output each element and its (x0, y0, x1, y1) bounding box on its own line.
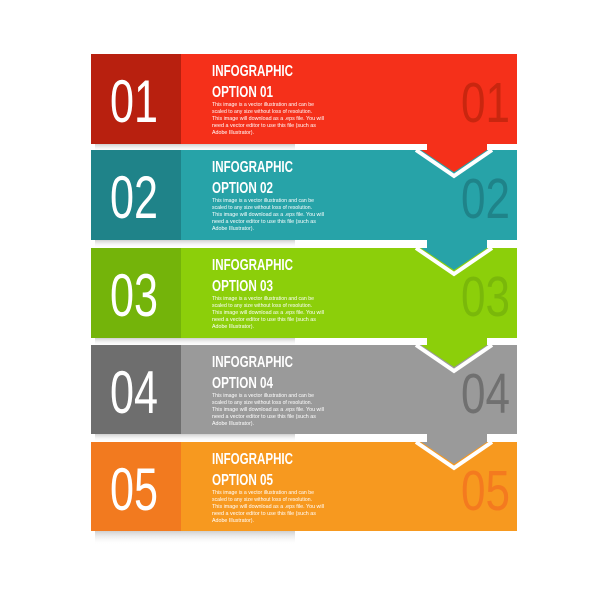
band 2: This image will download as a .eps file. You will (212, 212, 324, 218)
band 1: scaled to any size without loss of resolution. (212, 109, 312, 115)
band 5: This image will download as a .eps file. You will (212, 504, 324, 510)
band 3: INFOGRAPHIC (212, 257, 293, 274)
band 4: Adobe Illustrator). (212, 421, 254, 427)
band 5: scaled to any size without loss of resolution. (212, 497, 312, 503)
band 5: need a vector editor to use this file (such as (212, 511, 316, 517)
arrow 1 (416, 143, 492, 176)
band 1: 01 (110, 68, 158, 135)
band 2: This image is a vector illustration and can be (212, 198, 314, 204)
band 5: 05 (461, 459, 510, 523)
band 2: need a vector editor to use this file (such as (212, 219, 316, 225)
band 5: Adobe Illustrator). (212, 518, 254, 524)
band 2: Adobe Illustrator). (212, 226, 254, 232)
band 3: need a vector editor to use this file (such as (212, 317, 316, 323)
band 5: OPTION 05 (212, 472, 273, 489)
band 3 (91, 248, 517, 338)
band 2: OPTION 02 (212, 180, 273, 197)
band 2 (91, 150, 517, 240)
band 4: This image is a vector illustration and can be (212, 393, 314, 399)
band 4: need a vector editor to use this file (such as (212, 414, 316, 420)
band 2: 02 (110, 164, 158, 231)
band 4: This image will download as a .eps file. You will (212, 407, 324, 413)
band 2: 02 (461, 167, 510, 231)
band 5: 05 (110, 456, 158, 523)
shadows (95, 144, 295, 545)
band 4: OPTION 04 (212, 375, 273, 392)
band 4: scaled to any size without loss of resolution. (212, 400, 312, 406)
band 4: 04 (110, 359, 158, 426)
band 1: Adobe Illustrator). (212, 130, 254, 136)
band 2: INFOGRAPHIC (212, 159, 293, 176)
band 5 (91, 442, 517, 531)
band 1: This image is a vector illustration and can be (212, 102, 314, 108)
band 4: 04 (461, 362, 510, 426)
band 3: Adobe Illustrator). (212, 324, 254, 330)
band 3: 03 (110, 262, 158, 329)
band 4 (91, 345, 517, 434)
band 1: OPTION 01 (212, 84, 273, 101)
arrow 2 (416, 239, 492, 274)
band 3: scaled to any size without loss of resolution. (212, 303, 312, 309)
band 5: INFOGRAPHIC (212, 451, 293, 468)
band 1 (91, 54, 517, 144)
band 3: OPTION 03 (212, 278, 273, 295)
band 1: need a vector editor to use this file (such as (212, 123, 316, 129)
arrow 3 (416, 337, 492, 371)
band 3: This image will download as a .eps file. You will (212, 310, 324, 316)
band 2: scaled to any size without loss of resolution. (212, 205, 312, 211)
arrow 4 (416, 433, 492, 468)
band 3: This image is a vector illustration and can be (212, 296, 314, 302)
band 3: 03 (461, 265, 510, 329)
band 4: INFOGRAPHIC (212, 354, 293, 371)
band 1: INFOGRAPHIC (212, 63, 293, 80)
band 1: This image will download as a .eps file. You will (212, 116, 324, 122)
band 5: This image is a vector illustration and can be (212, 490, 314, 496)
band 1: 01 (461, 71, 510, 135)
